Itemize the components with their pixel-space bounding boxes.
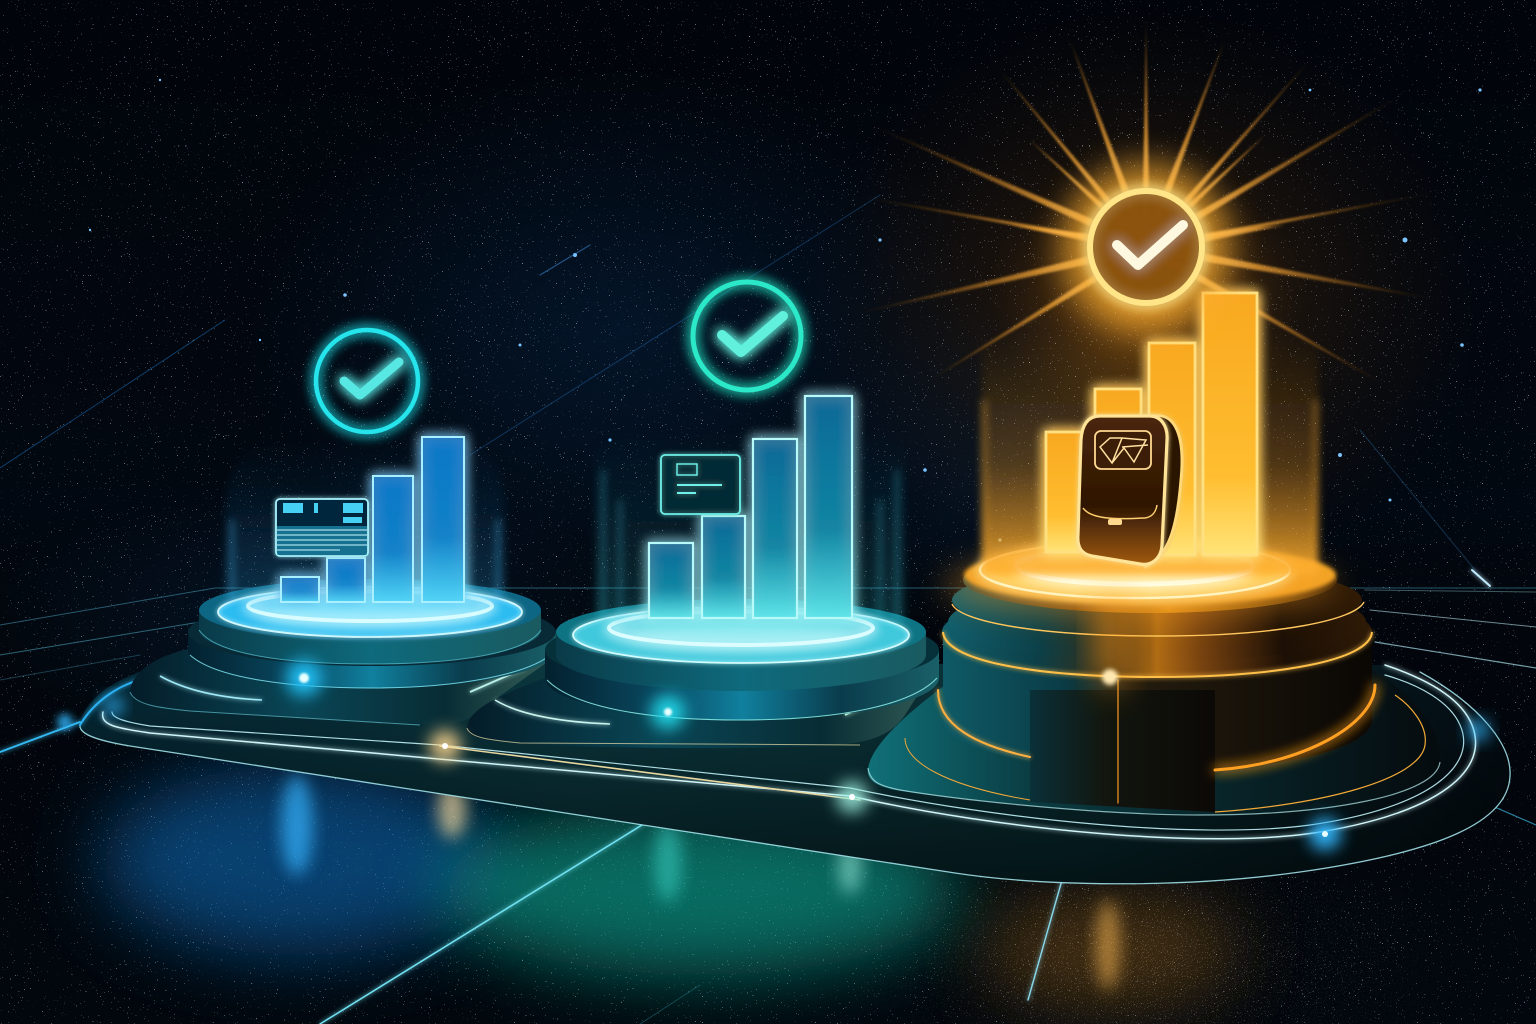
sun glow bbox=[1061, 162, 1231, 332]
tier middle bbox=[545, 636, 939, 720]
glow node bbox=[286, 660, 322, 696]
podium 2: teal bbox=[467, 282, 940, 748]
platform light nodes bbox=[57, 696, 1489, 850]
glowing ring bbox=[945, 555, 1335, 615]
background light streaks bbox=[0, 195, 1490, 586]
icon: credit card bbox=[276, 499, 368, 556]
platform edge lines bbox=[80, 665, 1510, 884]
top disc bbox=[963, 547, 1337, 613]
bar chart bbox=[649, 396, 852, 618]
bar chart bbox=[281, 437, 464, 602]
icon: check badge bbox=[316, 330, 418, 432]
tier top bbox=[199, 596, 541, 664]
floor and horizon lines bbox=[0, 588, 1536, 1024]
tier base bbox=[130, 645, 550, 725]
cylinder light lines bbox=[938, 680, 1375, 803]
sun rays bbox=[850, 20, 1450, 385]
floor bbox=[64, 750, 1452, 1024]
tier base bbox=[467, 660, 940, 748]
hologram cylinder bbox=[982, 330, 1318, 575]
podium 1: blue bbox=[130, 330, 556, 725]
podium 3: gold bbox=[868, 162, 1440, 815]
glow node bbox=[651, 695, 685, 729]
hologram dome bbox=[225, 438, 505, 605]
tier lower ring bbox=[942, 587, 1372, 677]
tier top bbox=[556, 619, 926, 691]
tier upper ring bbox=[952, 564, 1362, 636]
hologram columns bbox=[595, 430, 905, 625]
glowing ring bbox=[218, 587, 522, 637]
cylinder bbox=[943, 630, 1372, 770]
tier middle bbox=[188, 612, 556, 688]
front block bbox=[1030, 690, 1215, 812]
tier base bbox=[868, 670, 1440, 815]
glowing ring bbox=[573, 607, 909, 663]
platform base bbox=[80, 662, 1510, 884]
icon: card bbox=[661, 455, 740, 514]
icon: payment device bbox=[1078, 416, 1182, 566]
bar chart bbox=[1046, 293, 1257, 555]
icon: check badge bbox=[693, 282, 801, 390]
icon: check badge bbox=[1090, 191, 1202, 303]
